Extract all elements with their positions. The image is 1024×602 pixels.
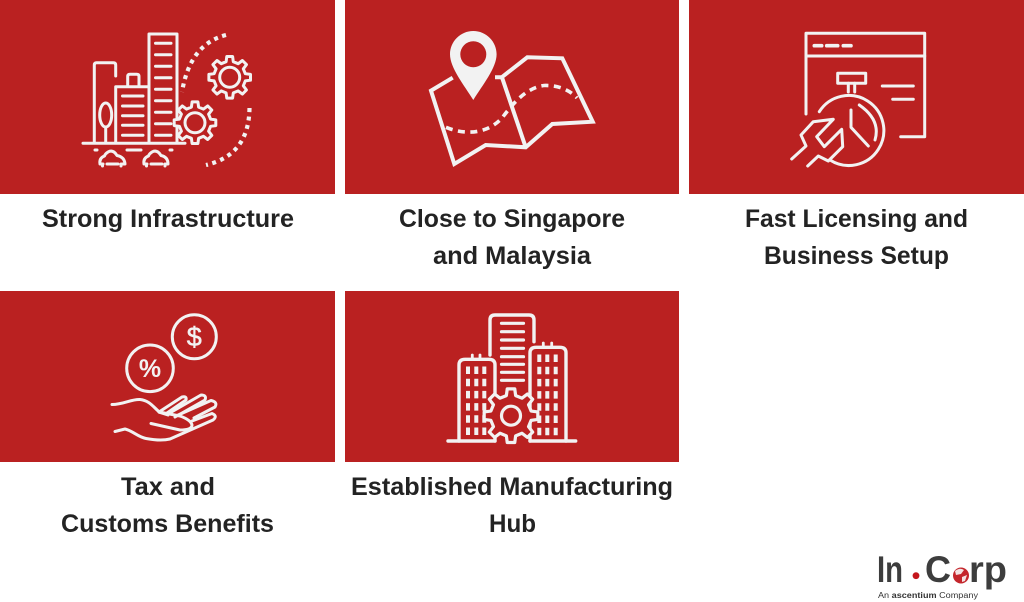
red card (0, 291, 335, 462)
logo: InCorp (877, 549, 1007, 600)
red card (689, 0, 1024, 194)
percent sign: % (139, 355, 161, 383)
icon: hand with coins (112, 315, 216, 440)
panel: strong infrastructure (0, 0, 335, 233)
wordmark C: C (925, 549, 951, 590)
red card (0, 0, 335, 194)
dollar sign: $ (187, 322, 202, 352)
icon: towers with gear (448, 315, 576, 443)
heading: Strong Infrastructure (42, 205, 294, 233)
icon: browser, stopwatch and wrench (792, 33, 925, 166)
wordmark In: In (877, 549, 903, 590)
heading: Tax and (121, 473, 215, 501)
heading: Established Manufacturing (351, 473, 673, 501)
panel: tax and customs benefits (0, 291, 335, 538)
red card (345, 291, 679, 462)
heading: Fast Licensing and (745, 205, 968, 233)
panel: established manufacturing hub (345, 291, 679, 538)
red card (345, 0, 679, 194)
panel: close to singapore and malaysia (345, 0, 679, 270)
icon: city with gears (83, 34, 250, 166)
tagline: An ascentium Company (878, 591, 978, 600)
panel: fast licensing and business setup (689, 0, 1024, 270)
heading line two: and Malaysia (433, 242, 592, 270)
heading line two: Customs Benefits (61, 510, 274, 538)
heading: Close to Singapore (399, 205, 625, 233)
heading line two: Hub (489, 510, 536, 538)
red dot (913, 572, 919, 579)
heading line two: Business Setup (764, 242, 949, 270)
wordmark rp: rp (969, 549, 1007, 590)
icon: map with pin (431, 31, 593, 164)
globe (953, 568, 969, 584)
